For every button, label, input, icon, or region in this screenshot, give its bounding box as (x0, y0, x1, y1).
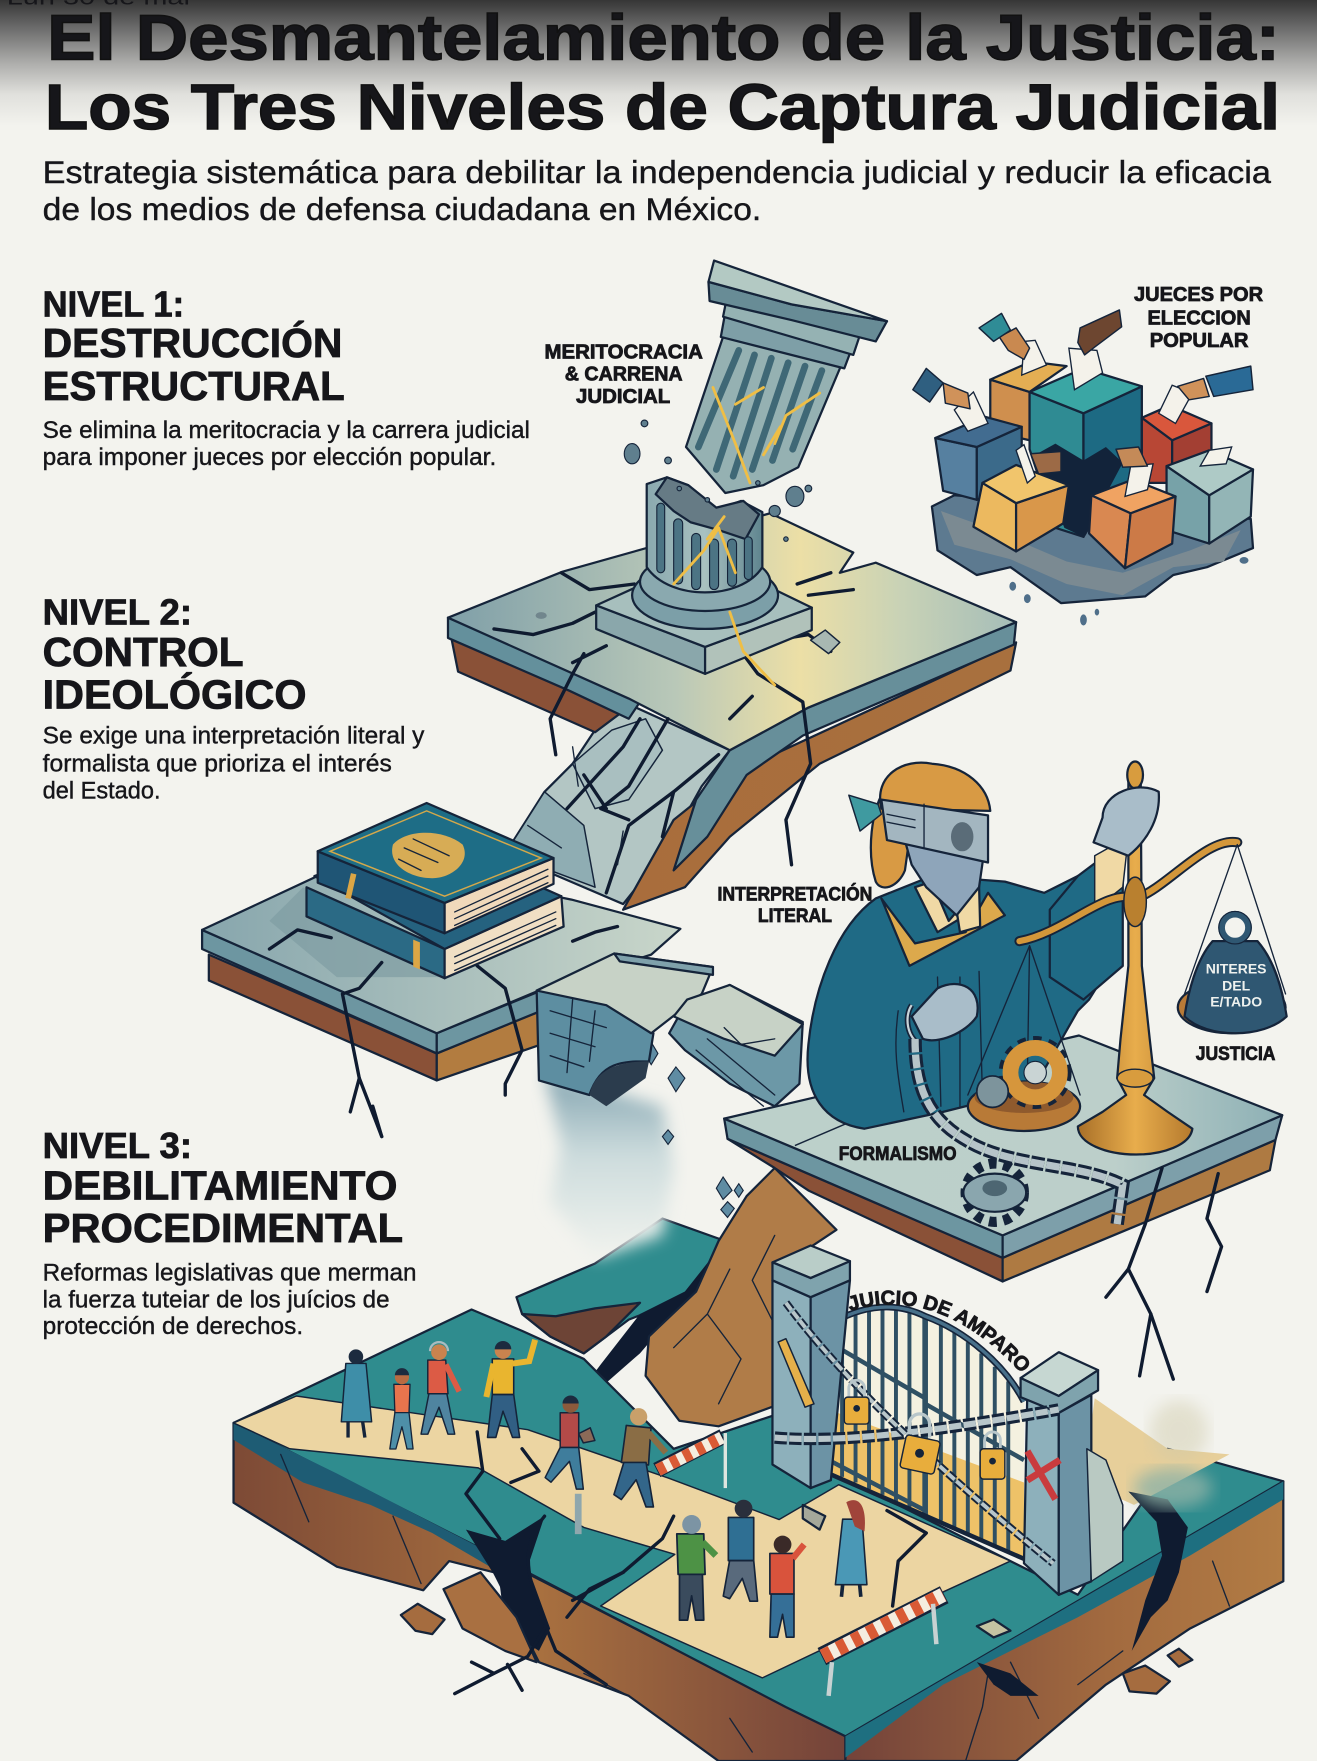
upper column (686, 261, 887, 493)
slab top (724, 1035, 1282, 1235)
left brown side (451, 638, 631, 732)
scale pillar (1078, 761, 1192, 1155)
ballots (954, 340, 1232, 496)
text: bell weight: NITERES (1206, 961, 1267, 977)
left earth side (234, 1423, 845, 1761)
chain (915, 1039, 1123, 1224)
subtitle: Estrategia sistemática para debilitar la independencia judicial y reducir la eficacia (43, 155, 1272, 190)
cuff hand (912, 984, 978, 1040)
heading: nivel 3 (43, 1125, 403, 1251)
title: El Desmantelamiento de la Justicia: (47, 2, 1280, 74)
capital rings (721, 312, 851, 368)
slab top (202, 867, 680, 1033)
text: nivel 1 description (43, 417, 530, 470)
text: nivel 2 description: del Estado. (43, 778, 161, 804)
left scale pan (968, 946, 1080, 1131)
chains across gate (775, 1303, 1059, 1563)
right stone band (674, 622, 1016, 870)
left span (537, 954, 713, 1106)
red tape (1027, 1451, 1060, 1499)
text: juicio de amparo: JUICIO DE AMPARO (848, 1290, 1030, 1371)
illustration: broken column (596, 261, 887, 685)
barrier 2 (822, 1595, 944, 1696)
person 5 (545, 1395, 595, 1489)
cracks under platform (1128, 1168, 1173, 1379)
red box (1142, 405, 1211, 483)
illustration: broken bridge (537, 954, 803, 1106)
title: Los Tres Niveles de Captura Judicial (45, 71, 1280, 143)
padlocks (844, 1380, 1005, 1479)
right span (669, 985, 803, 1106)
raised sleeve (1050, 842, 1123, 1000)
label: interpretación literal: INTERPRETACIÓN (717, 884, 872, 906)
brown rock column (646, 1168, 836, 1426)
right scale pan with bell (1178, 845, 1287, 1033)
book shadow (269, 887, 449, 977)
earth sides (728, 1139, 1003, 1281)
person 3 (421, 1342, 459, 1434)
label: jueces (1134, 284, 1263, 352)
heading: nivel 1: ESTRUCTURAL (43, 363, 345, 409)
label: meritocracia: MERITOCRACIA (545, 341, 703, 363)
heading: nivel 1: DESTRUCCIÓN (43, 320, 342, 366)
label: interpretación literal: LITERAL (758, 906, 832, 927)
mist under bridge (545, 1073, 674, 1258)
text: nivel 3 description (43, 1259, 417, 1339)
label: meritocracia: & CARRENA (565, 364, 683, 386)
text: nivel 2 description: formalista que prioriza el interés (43, 751, 392, 777)
stone bands (202, 930, 437, 1053)
teal ground surface (234, 1310, 1283, 1736)
illustration: level 2 platform (202, 867, 680, 1137)
right scale pan with bell: E/TADO (1210, 993, 1262, 1009)
person 2 (390, 1368, 413, 1449)
subtitle: de los medios de defensa ciudadana en México. (43, 192, 761, 227)
dark gap between boxes (1035, 444, 1123, 537)
rock base (932, 495, 1253, 603)
label: justicia: JUSTICIA (1196, 1044, 1276, 1065)
left pillar (772, 1246, 850, 1488)
lower shaft (647, 477, 762, 592)
scattered rocks (401, 1505, 1192, 1694)
shadow mist on right (1150, 1400, 1208, 1463)
gears in pan (1004, 1041, 1067, 1104)
right chasm (1128, 1491, 1188, 1651)
slab top (448, 513, 1016, 750)
small rocks (1009, 557, 1249, 626)
illustration: justice figure (808, 761, 1287, 1224)
top dark gradient band (0, 0, 1317, 126)
icon: eagle emblem (392, 833, 465, 878)
blue box (935, 417, 1022, 500)
subtitle (43, 155, 1272, 227)
upper gloved hand (1094, 787, 1159, 856)
cracks (269, 927, 618, 949)
left cliff chunk and cavity (466, 1516, 550, 1651)
person 1 (341, 1349, 372, 1438)
plinth (596, 556, 812, 674)
right earth side (845, 1481, 1283, 1761)
illustration: level 1 platform (448, 513, 1016, 910)
text: nivel 2 description (43, 722, 425, 804)
column base rings (632, 562, 778, 629)
person 8 (723, 1500, 758, 1601)
orange box (1089, 480, 1176, 568)
gate arch (829, 1307, 1024, 1402)
neck and face (904, 837, 984, 915)
big teal box (1030, 368, 1142, 537)
illustration: law books (307, 803, 564, 978)
barrier 1 (578, 1433, 725, 1534)
label: jueces: JUECES POR (1134, 284, 1263, 306)
upper book (318, 803, 554, 933)
heading: nivel 3: NIVEL 3: (43, 1125, 192, 1166)
text: nivel 1 description: Se elimina la meritocracia y la carrera judicial (43, 417, 530, 443)
title (45, 2, 1280, 143)
heading: nivel 3: PROCEDIMENTAL (43, 1205, 403, 1251)
root crack left (455, 1628, 545, 1694)
dark teal lip (234, 1423, 528, 1572)
label: jueces: POPULAR (1150, 330, 1249, 352)
brown sides (209, 955, 437, 1080)
sand path (234, 1396, 1010, 1678)
heading: nivel 2: IDEOLÓGICO (43, 672, 307, 718)
floor gear (963, 1164, 1026, 1222)
hair top (880, 763, 990, 811)
rear sand corner (1083, 1398, 1229, 1505)
person 10 (835, 1500, 867, 1597)
person 7 (677, 1515, 716, 1620)
lower book (307, 837, 564, 978)
sleeve fold (896, 971, 982, 1112)
stray rubble on slab (811, 630, 840, 654)
crack on earth left (281, 1454, 752, 1752)
text: nivel 3 description: la fuerza tuteiar de los juícios de (43, 1286, 390, 1312)
label: meritocracia: JUDICIAL (576, 386, 670, 408)
falling stones (644, 1042, 743, 1217)
label: formalismo: FORMALISMO (839, 1144, 957, 1165)
rear cliff chunk (516, 1219, 741, 1409)
label: jueces: ELECCION (1147, 308, 1251, 330)
back yellow box (990, 380, 1030, 440)
gate backdrop (829, 1308, 1024, 1558)
yellow box (973, 465, 1069, 551)
slab cracks (494, 573, 853, 651)
gate bottom rail (829, 1473, 1024, 1559)
heading: nivel 2 (43, 591, 307, 718)
debris (624, 420, 812, 541)
gold cracks (674, 387, 820, 685)
path cracks (528, 719, 719, 893)
group: people walking (341, 1340, 867, 1637)
left stone band (448, 618, 642, 719)
stone bands (724, 1119, 1003, 1258)
gate bars (829, 1308, 1024, 1552)
handcuff (908, 1005, 921, 1044)
person 9 (770, 1536, 804, 1637)
scale beam (1019, 842, 1237, 941)
label: meritocracia (545, 341, 703, 408)
text: nivel 1 description: para imponer jueces por elección popular. (43, 444, 496, 470)
text: nivel 2 description: Se exige una interpretación literal y (43, 722, 425, 748)
person 4 (486, 1340, 535, 1437)
collar (915, 882, 968, 932)
heading: nivel 1 (43, 284, 345, 409)
brown right side of path (623, 642, 1016, 910)
heading: nivel 3: DEBILITAMIENTO (43, 1162, 397, 1208)
illustration: amparo gate (771, 1244, 1124, 1596)
person 6 (614, 1408, 666, 1507)
right scale pan with bell: DEL (1222, 978, 1251, 994)
right pillar (1021, 1352, 1123, 1595)
robe (808, 854, 1123, 1129)
yellow tape (778, 1339, 814, 1407)
gold yoke (881, 893, 1005, 966)
barriers (578, 1433, 944, 1696)
heading: nivel 1: NIVEL 1: (43, 284, 184, 325)
back hair (871, 786, 915, 887)
illustration: ballot boxes (913, 310, 1253, 626)
broken top (656, 477, 759, 539)
capital plate (708, 282, 887, 341)
illustration: ground of level 3 (234, 1168, 1283, 1761)
flutes (657, 503, 752, 590)
voter hands (913, 310, 1253, 474)
text: nivel 3 description: Reformas legislativas que merman (43, 1259, 417, 1285)
seam line (795, 1089, 926, 1146)
heading: nivel 2: CONTROL (43, 629, 244, 675)
crumbling path pieces (505, 705, 730, 904)
pale teal box (1167, 450, 1253, 544)
blindfold (849, 795, 988, 863)
illustration: level 3 upper platform (724, 1035, 1282, 1379)
label: interpretación literal (717, 884, 872, 927)
text: nivel 3 description: protección de derechos. (43, 1313, 303, 1339)
path cracks (466, 1432, 926, 1606)
heading: nivel 2: NIVEL 2: (43, 591, 192, 632)
